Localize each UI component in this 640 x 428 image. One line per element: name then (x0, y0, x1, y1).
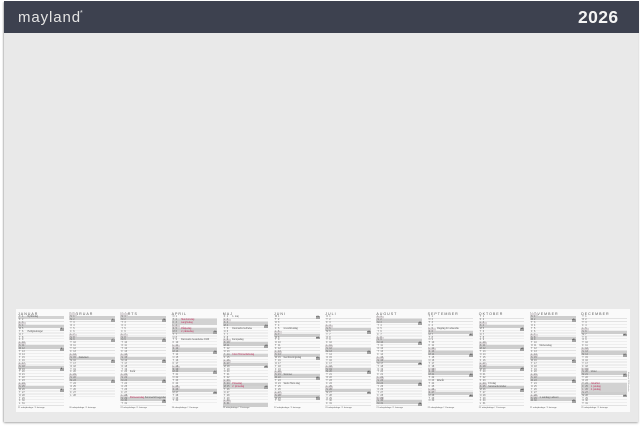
panel: januar: JANUAR (18, 312, 38, 316)
panel: december: T O T F L S M T O T F L S M T O T F L S M T O T F L S M T O T (582, 315, 584, 405)
panel: december: 51 (623, 354, 626, 356)
panel: marts: 10 (163, 319, 165, 321)
panel: april: 19 arbejdsdage / 1 ferieuge (172, 406, 198, 408)
panel: juni: Grundlovsdag (284, 328, 298, 330)
panel: november: 1. søndag i advent (540, 397, 558, 399)
panel: oktober (478, 312, 524, 408)
panel: marts: Forår (130, 371, 135, 373)
panel: juli: O T F L S M T O T F L S M T O T F L S M T O T F L S M T O T F (326, 315, 328, 405)
panel: juni: 24 (316, 336, 319, 338)
panel: april: Skærtorsdag (181, 319, 194, 321)
panel: oktober: FN-dag (488, 383, 496, 385)
panel: juli: 29 (367, 351, 370, 353)
panel: marts: 11 (163, 339, 165, 341)
panel: december: 52 (623, 374, 626, 376)
panel: december: Vinter (591, 371, 597, 373)
panel: februar: S M T O T F L S M T O T F L S M T O T F L S M T O T F L (70, 315, 72, 397)
vertical imprint text: Mayland 2026 kalender (627, 372, 629, 392)
logo: mayland: mayland* (18, 9, 84, 26)
panel: august: 21 arbejdsdage / 1 ferieuge (376, 406, 403, 408)
panel: juni: M T O T F L S M T O T F L S M T O T F L S M T O T F L S M T (275, 315, 277, 402)
header band (4, 1, 639, 33)
panel: juni (274, 312, 320, 408)
calendar strip (16, 309, 630, 412)
panel: maj: Danmarks befrielse (232, 328, 252, 330)
panel: august: 35 (419, 383, 421, 385)
panel: marts: Palmesøndag Sommertid begynder (130, 397, 166, 399)
panel: januar: Nytårsdag (28, 316, 38, 318)
panel: april (172, 312, 217, 408)
panel: april: Danmarks besættelse 1940 (181, 339, 209, 341)
panel: februar: 7 (112, 339, 113, 341)
panel: oktober: 44 (521, 389, 524, 391)
panel: maj: 19 (265, 325, 268, 327)
panel: juni: 25 (316, 357, 319, 359)
panel: maj: 20 (265, 345, 268, 347)
panel: september: SEPTEMBER (428, 312, 459, 316)
panel: september: 22 arbejdsdage / 1 ferieuge (428, 406, 454, 408)
panel: maj: 1 2 3 4 5 6 7 8 9 10 11 12 13 14 15 16 17 18 19 20 21 22 23 24 25 26 27 28 29 30 31 (227, 315, 229, 405)
panel: maj: Europadag (232, 339, 244, 341)
panel: september: 37 (470, 334, 472, 336)
panel: november: 46 (572, 339, 575, 341)
panel: december: 50 (623, 334, 626, 336)
panel: september: T O T F L S M T O T F L S M T O T F L S M T O T F L S M T O (429, 315, 431, 402)
panel: august: 1 2 3 4 5 6 7 8 9 10 11 12 13 14 15 16 17 18 19 20 21 22 23 24 25 26 27 28 29 30 31 (380, 315, 383, 405)
panel: november: NOVEMBER (530, 312, 559, 316)
panel: maj: Kristi Himmelfartsdag (232, 354, 254, 356)
panel: juni: 26 (316, 377, 319, 379)
panel: oktober: Sommertid slutter (488, 386, 506, 388)
panel: august: 34 (419, 363, 421, 365)
panel: april: 1 2 3 4 5 6 7 8 9 10 11 12 13 14 15 16 17 18 19 20 21 22 23 24 25 26 27 28 29 30 (176, 315, 178, 402)
panel: januar: 21 arbejdsdage / 1 ferieuge (18, 406, 45, 408)
panel: december: 53 (623, 394, 626, 396)
panel: maj: 21 (265, 366, 268, 368)
panel: november: 21 arbejdsdage / 1 ferieuge (530, 406, 557, 408)
panel: marts (120, 312, 166, 408)
panel: september: 39 (470, 374, 472, 376)
panel: oktober: 42 (521, 348, 524, 350)
panel: august: AUGUST (376, 312, 397, 316)
panel: juni: 22 arbejdsdage / 1 ferieuge (274, 406, 301, 408)
panel: september: Flagdag for udsendte (437, 328, 459, 330)
panel: januar: T F L S M T O T F L S M T O T F L S M T O T F L S M T O T F L (19, 315, 21, 405)
panel: februar: Fastelavn (79, 357, 89, 359)
panel: oktober: OKTOBER (479, 312, 503, 316)
panel: december: 2. juledag (591, 389, 601, 391)
panel: juli (325, 312, 371, 408)
panel: april: 2. påskedag (181, 331, 194, 333)
panel: december: 21 arbejdsdage / 1 ferieuge (581, 406, 608, 408)
panel: april: 18 (214, 392, 216, 394)
panel: marts: 1 2 3 4 5 6 7 8 9 10 11 12 13 14 15 16 17 18 19 20 21 22 23 24 25 26 27 28 29 30 31 (124, 315, 127, 405)
panel: januar: 3 (61, 348, 62, 350)
panel: maj: 19 arbejdsdage / 1 ferieuge (223, 406, 249, 408)
panel: november: 1 2 3 4 5 6 7 8 9 10 11 12 13 14 15 16 17 18 19 20 21 22 23 24 25 26 27 28 29 30 (534, 315, 537, 402)
panel: november: 49 (572, 400, 575, 402)
panel: maj: MAJ (223, 312, 233, 316)
panel: november (530, 312, 576, 408)
panel: marts: 13 (163, 380, 165, 382)
panel: juli: 23 arbejdsdage / 1 ferieuge (325, 406, 352, 408)
panel: oktober: 22 arbejdsdage / 1 ferieuge (479, 406, 505, 408)
panel: august (376, 312, 422, 408)
panel: januar: 5 (61, 389, 62, 391)
panel: juli: 28 (367, 331, 370, 333)
panel: december: 1. juledag (591, 386, 601, 388)
panel: januar: 1 2 3 4 5 6 7 8 9 10 11 12 13 14 15 16 17 18 19 20 21 22 23 24 25 26 27 28 29 30 31 (22, 315, 25, 405)
panel: september (428, 312, 473, 408)
panel: september: 40 (470, 394, 472, 396)
panel: april: Langfredag (181, 322, 193, 324)
panel: februar: 1 2 3 4 5 6 7 8 9 10 11 12 13 14 15 16 17 18 19 20 21 22 23 24 25 26 27 28 (73, 315, 76, 397)
panel: oktober: 41 (521, 328, 524, 330)
panel: april: Påskedag (181, 328, 191, 330)
panel: juli: JULI (325, 312, 337, 316)
panel: februar (69, 312, 115, 408)
panel: maj: 1. maj (232, 316, 239, 318)
panel: oktober: 1 2 3 4 5 6 7 8 9 10 11 12 13 14 15 16 17 18 19 20 21 22 23 24 25 26 27 28 29 30 31 (483, 315, 485, 405)
panel: februar: 9 (112, 380, 113, 382)
panel: september: Efterår (437, 380, 444, 382)
panel: januar (18, 312, 64, 408)
panel: maj: 2. pinsedag (232, 386, 244, 388)
panel: marts: 22 arbejdsdage / 1 ferieuge (120, 406, 147, 408)
panel: november: 45 (572, 319, 575, 321)
panel: januar: 2 (61, 328, 62, 330)
panel: april: APRIL (172, 312, 187, 316)
panel: januar: 4 (61, 368, 62, 370)
panel: februar: FEBRUAR (69, 312, 93, 316)
year: 2026 (578, 7, 619, 27)
panel: januar: Helligtrekonger (28, 331, 43, 333)
panel: maj: F L S M T O T F L S M T O T F L S M T O T F L S M T O T F L S (224, 315, 226, 405)
panel: februar: 6 (112, 319, 113, 321)
panel: marts: MARTS (120, 312, 138, 316)
panel: november: 48 (572, 380, 575, 382)
panel: juni: JUNI (274, 312, 286, 316)
panel: april: O T F L S M T O T F L S M T O T F L S M T O T F L S M T O T (173, 315, 175, 402)
panel: august: 32 (419, 322, 421, 324)
panel: juni: Sankt Hans dag (284, 383, 300, 385)
panel: maj: Pinsedag (232, 383, 242, 385)
panel: august: 36 (419, 403, 421, 405)
panel: juli: 30 (367, 371, 370, 373)
panel: november: S M T O T F L S M T O T F L S M T O T F L S M T O T F L S M (531, 315, 533, 402)
panel: juni: 27 (316, 397, 319, 399)
panel: november: 47 (572, 360, 575, 362)
panel: juni: 1 2 3 4 5 6 7 8 9 10 11 12 13 14 15 16 17 18 19 20 21 22 23 24 25 26 27 28 29 30 (278, 315, 281, 402)
panel: februar: 8 (112, 360, 113, 362)
panel: oktober: T F L S M T O T F L S M T O T F L S M T O T F L S M T O T F L (480, 315, 482, 405)
panel: april: 16 (214, 351, 216, 353)
panel: marts: S M T O T F L S M T O T F L S M T O T F L S M T O T F L S M T (121, 315, 123, 405)
panel: juni: 23 (316, 316, 319, 318)
panel: november: Mortensdag (540, 345, 552, 347)
panel: september: 38 (470, 354, 472, 356)
panel: maj: 22 (265, 386, 268, 388)
panel: marts: 12 (163, 360, 165, 362)
panel: juli: 31 (367, 392, 370, 394)
panel: maj (223, 312, 268, 408)
panel: september: 1 2 3 4 5 6 7 8 9 10 11 12 13 14 15 16 17 18 19 20 21 22 23 24 25 26 27 28 29 30 (432, 315, 434, 402)
panel: april: 17 (214, 371, 216, 373)
panel: december: 1 2 3 4 5 6 7 8 9 10 11 12 13 14 15 16 17 18 19 20 21 22 23 24 25 26 27 28 29 30 31 (585, 315, 588, 405)
panel: februar: 20 arbejdsdage / 1 ferieuge (69, 406, 96, 408)
panel: december (581, 312, 627, 408)
panel: juli: 1 2 3 4 5 6 7 8 9 10 11 12 13 14 15 16 17 18 19 20 21 22 23 24 25 26 27 28 29 30 31 (329, 315, 332, 405)
panel: oktober: 43 (521, 368, 524, 370)
panel: august: 33 (419, 342, 421, 344)
panel: december: Juleaften (591, 383, 600, 385)
panel: juni: Genforeningsdag (284, 357, 301, 359)
panel: marts: 14 (163, 400, 165, 402)
panel: april: 15 (214, 331, 216, 333)
panel: juni: Sommer (284, 374, 292, 376)
panel: december: DECEMBER (581, 312, 610, 316)
panel: august: L S M T O T F L S M T O T F L S M T O T F L S M T O T F L S M (377, 315, 379, 405)
